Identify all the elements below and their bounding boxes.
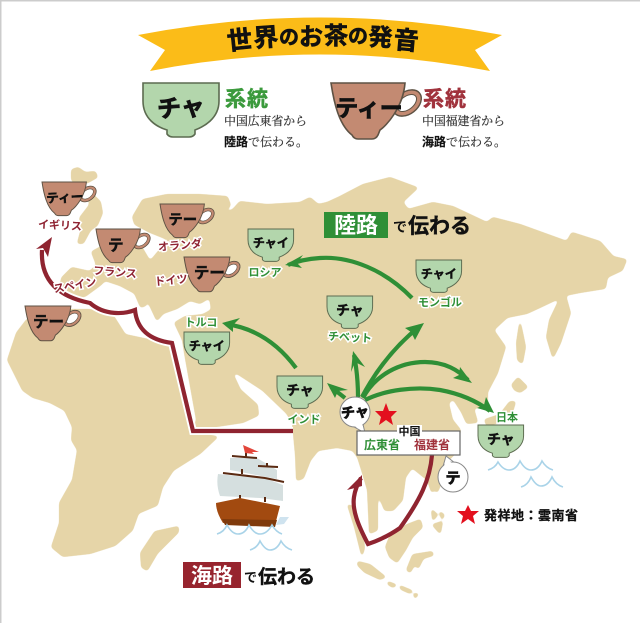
sea route from Fujian arrow <box>347 455 432 544</box>
heading: land route: 伝わる <box>408 215 471 238</box>
bowl: Mongolia <box>416 260 462 292</box>
bowl: Japan: チャ <box>487 432 515 447</box>
bowl: India <box>277 376 323 408</box>
title: お <box>299 24 323 51</box>
legend: birthplace <box>457 505 578 524</box>
speech bubble: cha <box>340 397 370 433</box>
star: origin <box>375 403 397 425</box>
tea lineage description: 海路で伝わる。 <box>422 135 506 149</box>
bowl: Tibet: チャ <box>336 303 364 318</box>
heading: land route: 陸路 <box>334 213 378 238</box>
heading: land route <box>324 212 471 238</box>
cup: Netherlands: テー <box>168 212 197 228</box>
bowl: India: チャ <box>286 383 314 398</box>
legend: tea lineage <box>331 83 506 149</box>
label: Japan: 日本 <box>496 410 518 424</box>
bowl: Japan <box>478 425 524 457</box>
legend: birthplace: 発祥地：雲南省 <box>484 508 578 523</box>
icon: legend green bowl: チャ <box>156 93 206 124</box>
title: 界 <box>252 23 279 53</box>
world map <box>8 168 626 598</box>
cup: France: テ <box>108 238 124 255</box>
label: Mongolia: モンゴル <box>418 295 462 309</box>
cup: UK: ティー <box>46 190 84 206</box>
icon: legend green bowl <box>143 83 219 137</box>
heading: sea route <box>183 562 315 588</box>
icon: legend brown cup <box>331 83 426 139</box>
bowl: Mongolia: チャイ <box>421 267 457 281</box>
bowl: Turkey <box>184 332 230 364</box>
label: UK: イギリス <box>38 218 82 233</box>
China label box: 福建省 <box>414 437 450 452</box>
cha lineage description: 陸路で伝わる。 <box>224 135 308 149</box>
label: Spain: スペイン <box>53 275 98 296</box>
icon: legend brown cup: ティー <box>335 95 403 121</box>
heading: sea route: 海路 <box>191 565 233 588</box>
bowl: Russia: チャイ <box>253 236 289 250</box>
label: Germany: ドイツ <box>154 273 188 288</box>
speech bubble: te <box>438 456 468 492</box>
label: Tibet: チベット <box>328 330 372 345</box>
title: の <box>348 26 368 48</box>
bowl: Russia <box>248 229 294 261</box>
China label box: 広東省 <box>364 437 400 452</box>
heading: sea route: で <box>244 570 257 585</box>
cup: Germany: テー <box>194 265 225 282</box>
label: France: フランス <box>93 264 137 281</box>
sea route to Europe arrow <box>36 237 293 431</box>
cup: UK <box>42 182 99 216</box>
land route arrows <box>222 255 494 413</box>
title: 世 <box>226 26 254 56</box>
title: の <box>279 27 299 49</box>
label: Russia: ロシア <box>248 266 282 279</box>
cup: Germany <box>184 257 243 292</box>
cup: France <box>96 229 153 263</box>
cup: Netherlands <box>160 204 217 238</box>
cha lineage heading: 系統 <box>225 88 268 111</box>
China label box <box>357 424 460 455</box>
illustration: ship <box>216 445 292 550</box>
tea lineage heading: 系統 <box>423 88 466 111</box>
cha lineage description: 中国広東省から <box>224 113 307 128</box>
title: 音 <box>392 26 420 56</box>
heading: land route: で <box>393 219 407 235</box>
China label box: 中国 <box>398 424 420 438</box>
bowl: Turkey: チャイ <box>189 339 225 353</box>
cup: Spain <box>25 306 84 341</box>
title banner <box>138 18 502 71</box>
label: Netherlands: オランダ <box>157 236 203 254</box>
legend: cha lineage <box>143 83 308 149</box>
bowl: Tibet <box>327 296 373 328</box>
label: Turkey: トルコ <box>185 317 217 329</box>
speech bubble: te: テ <box>445 470 461 487</box>
speech bubble: cha: チャ <box>340 403 370 421</box>
title: 発 <box>368 24 393 52</box>
title: 茶 <box>324 23 348 50</box>
heading: sea route: 伝わる <box>258 566 315 588</box>
cup: Spain: テー <box>33 314 64 331</box>
tea lineage description: 中国福建省から <box>422 113 505 128</box>
label: India: インド <box>288 413 320 426</box>
waves near Japan <box>488 461 563 487</box>
